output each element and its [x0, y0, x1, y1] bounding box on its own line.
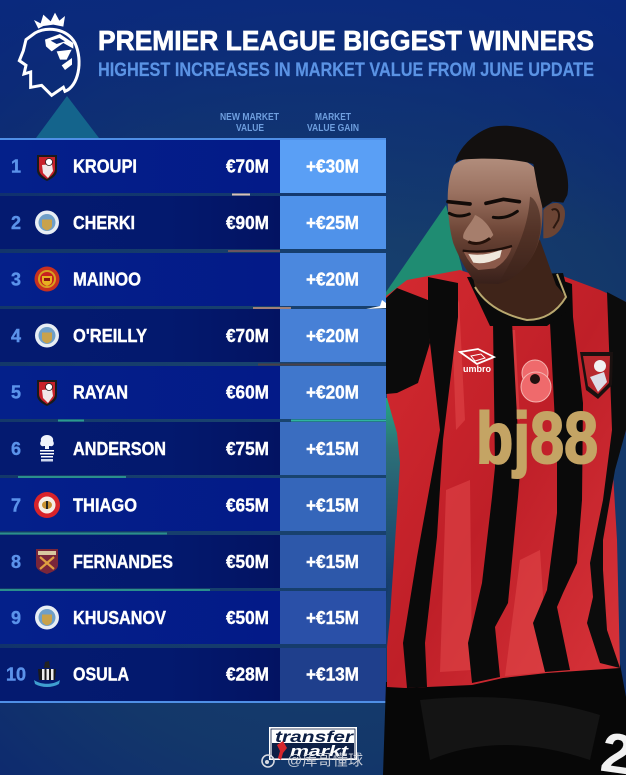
badge: Brentford [34, 492, 60, 518]
lion mane outline [19, 29, 79, 95]
column header: market value gain: MARKET [315, 112, 351, 123]
eyebrows [448, 199, 519, 204]
row 10: Osula: 10 [6, 664, 26, 684]
black stripe centre [468, 322, 520, 683]
poppy [521, 360, 551, 402]
black collar yoke [467, 273, 572, 326]
black sleeve right [587, 292, 626, 668]
row 3: Mainoo: +€20M [306, 270, 359, 290]
lion eye [45, 34, 73, 51]
row 4: O'Reilly: O'REILLY [73, 326, 147, 346]
sponsor: bj88 [476, 399, 598, 479]
row 1: Kroupi: KROUPI [73, 156, 137, 176]
neck [470, 240, 566, 319]
badge: Manchester United [34, 266, 60, 292]
row 5: Rayan: RAYAN [73, 382, 128, 402]
badge: West Ham [36, 549, 58, 574]
club crest [580, 352, 613, 399]
row 4: O'Reilly: €70M [226, 326, 269, 346]
watermark: @库哥懂球 [287, 752, 363, 769]
row 5: Rayan: +€20M [306, 382, 359, 402]
table bottom rule [0, 701, 386, 703]
badge: Bournemouth [37, 155, 57, 181]
face [448, 154, 542, 284]
row 9: Khusanov: +€15M [306, 608, 359, 628]
column header: new market value line 2: VALUE [236, 123, 264, 134]
row 8: Fernandes [0, 535, 386, 588]
row 5: Rayan: €60M [226, 382, 269, 402]
ear [543, 203, 565, 238]
row 9: Khusanov: 9 [11, 608, 21, 628]
row 9: Khusanov: KHUSANOV [73, 608, 166, 628]
row 6: Anderson: €75M [226, 439, 269, 459]
eyes [449, 211, 517, 218]
row 7: Thiago: +€15M [306, 496, 359, 516]
title: PREMIER LEAGUE BIGGEST WINNERS [98, 25, 594, 56]
row 10: Osula: €28M [226, 664, 269, 684]
row 1: Kroupi [0, 140, 386, 193]
nose [463, 215, 493, 242]
row 2: Cherki: €90M [226, 213, 269, 233]
row 4: O'Reilly: 4 [11, 326, 21, 346]
badge: Nottingham Forest [40, 435, 54, 462]
Transfermarkt logo [269, 727, 357, 760]
row 8: Fernandes: FERNANDES [73, 552, 173, 572]
row 5: Rayan [0, 366, 386, 419]
column header: market value gain line 2: VALUE GAIN [307, 123, 359, 134]
row 9: Khusanov: €50M [226, 608, 269, 628]
row 9: Khusanov [0, 591, 386, 644]
row 4: O'Reilly [0, 309, 386, 362]
jersey [386, 270, 626, 688]
row 3: Mainoo: MAINOO [73, 270, 141, 290]
crown [34, 13, 65, 29]
table top rule [0, 138, 386, 140]
row 1: Kroupi: 1 [11, 156, 21, 176]
row 2: Cherki [0, 196, 386, 249]
green triangle behind player [386, 205, 470, 300]
row 7: Thiago: THIAGO [73, 496, 137, 516]
row 7: Thiago: €65M [226, 496, 269, 516]
green strip beside player [386, 398, 404, 600]
row 10: Osula [0, 648, 386, 701]
badge: Manchester City [35, 324, 59, 348]
badge: Manchester City [35, 606, 59, 630]
right face shadow [498, 197, 541, 284]
umbro logo: umbro [463, 364, 492, 374]
badge: Newcastle [34, 661, 60, 687]
row 6: Anderson: +€15M [306, 439, 359, 459]
row 8: Fernandes: +€15M [306, 552, 359, 572]
lion muzzle [57, 50, 72, 60]
mouth [463, 247, 512, 270]
row 8: Fernandes: €50M [226, 552, 269, 572]
shorts [383, 664, 626, 775]
hair [455, 126, 568, 208]
column header: new market value: NEW MARKET [220, 112, 279, 123]
Transfermarkt logo: markt [290, 743, 349, 760]
Premier League lion logo [19, 13, 79, 95]
row 6: Anderson: 6 [11, 439, 21, 459]
row 6: Anderson [0, 422, 386, 475]
row 10: Osula: +€13M [306, 664, 359, 684]
black stripe right [533, 278, 583, 672]
badge: Bournemouth [37, 380, 57, 406]
row 8: Fernandes: 8 [11, 552, 21, 572]
black stripe left [403, 277, 458, 688]
row 2: Cherki: +€25M [306, 213, 359, 233]
row 6: Anderson: ANDERSON [73, 439, 166, 459]
collar [475, 274, 566, 320]
head [448, 126, 568, 284]
slivers of background showing through row gaps [0, 194, 386, 591]
row 7: Thiago [0, 478, 386, 531]
row 5: Rayan: 5 [11, 382, 21, 402]
badge: Manchester City [35, 210, 59, 234]
row 3: Mainoo: 3 [11, 270, 21, 290]
row 10: Osula: OSULA [73, 664, 129, 684]
player: Kroupi in Bournemouth kit [383, 126, 626, 775]
row 3: Mainoo [0, 253, 386, 306]
umbro logo [460, 349, 494, 374]
jersey highlights [423, 280, 548, 676]
row 7: Thiago: 7 [11, 496, 21, 516]
Transfermarkt logo: transfer [275, 729, 354, 746]
row 2: Cherki: 2 [11, 213, 21, 233]
row 1: Kroupi: €70M [226, 156, 269, 176]
row 1: Kroupi: +€30M [306, 156, 359, 176]
row 4: O'Reilly: +€20M [306, 326, 359, 346]
jersey left sleeve [386, 288, 430, 394]
row 2: Cherki: CHERKI [73, 213, 135, 233]
decorative triangle behind table [36, 96, 99, 138]
